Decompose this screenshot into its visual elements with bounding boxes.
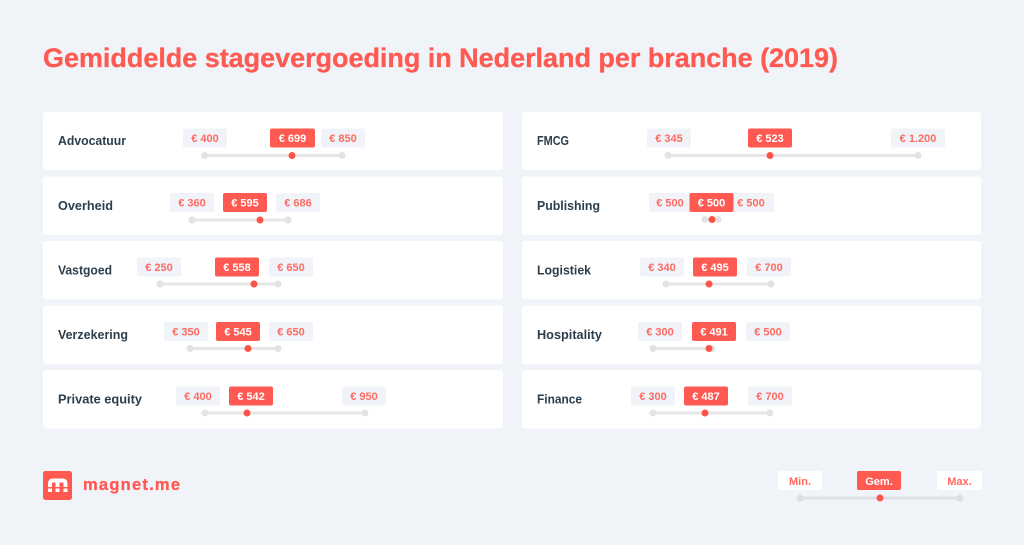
panel: Logistiek: € 700 [755, 262, 783, 274]
panel: Logistiek: € 495 [701, 262, 729, 274]
panel: Hospitality: € 300 [646, 326, 674, 338]
panel: Hospitality: Hospitality [537, 328, 602, 342]
panel: Verzekering [43, 306, 503, 364]
panel: Verzekering: € 350 [172, 326, 200, 338]
panel: Advocatuur: € 400 [191, 133, 219, 145]
legend: Gem. [865, 476, 893, 488]
icon: magnet [43, 471, 72, 500]
panel: Finance: € 487 [692, 391, 720, 403]
panel: Overheid: € 360 [178, 198, 206, 210]
panel: Logistiek: Logistiek [537, 264, 591, 278]
panel: Vastgoed: € 250 [145, 262, 173, 274]
panel: Finance: Finance [537, 392, 582, 406]
panel: Hospitality: € 491 [700, 326, 728, 338]
panel: Verzekering: Verzekering [58, 328, 128, 342]
title: Gemiddelde stagevergoeding in Nederland per branche (2019) [43, 43, 838, 73]
panel: Finance: € 700 [756, 391, 784, 403]
panel: Advocatuur: € 850 [329, 133, 357, 145]
panel: Vastgoed: Vastgoed [58, 264, 112, 278]
panel: Vastgoed: € 650 [277, 262, 305, 274]
panel: FMCG: FMCG [537, 134, 569, 148]
legend [778, 471, 982, 502]
panel: Verzekering: € 650 [277, 326, 305, 338]
panel: Hospitality: € 500 [754, 326, 782, 338]
panel: Verzekering: € 545 [224, 326, 252, 338]
panel: Overheid [43, 176, 503, 235]
panel: Publishing: € 500 [698, 198, 725, 210]
panel: Private equity [43, 370, 503, 428]
panel: Publishing: € 500 [656, 198, 684, 210]
panel: Publishing: Publishing [537, 199, 600, 213]
panel: Overheid: € 595 [231, 198, 259, 210]
panel: Advocatuur: Advocatuur [58, 134, 126, 148]
panel: Overheid: Overheid [58, 199, 113, 213]
panel: Logistiek: € 340 [648, 262, 676, 274]
panel: Publishing [522, 176, 981, 235]
legend: Min. [789, 476, 811, 488]
panel: FMCG: € 1.200 [900, 133, 936, 145]
panel: Advocatuur [43, 112, 503, 170]
panel: Private equity: Private equity [58, 392, 142, 406]
legend: Max. [947, 476, 972, 488]
panel: Vastgoed [43, 241, 503, 300]
panel: Private equity: € 542 [237, 391, 265, 403]
panel: Vastgoed: € 558 [223, 262, 251, 274]
panel: Private equity: € 950 [350, 391, 378, 403]
panel: Private equity: € 400 [184, 391, 212, 403]
panel: Finance: € 300 [639, 391, 667, 403]
logo: magnet.me [43, 471, 180, 500]
panel: Finance [522, 370, 981, 428]
panel: FMCG: € 523 [756, 133, 784, 145]
wordmark: magnet.me [83, 476, 180, 494]
panel: FMCG: € 345 [655, 133, 683, 145]
panel: Logistiek [522, 241, 981, 300]
panel: FMCG [522, 112, 981, 170]
panel: Overheid: € 686 [284, 198, 312, 210]
panel: Hospitality [522, 306, 981, 364]
panel: Advocatuur: € 699 [279, 133, 306, 145]
panel: Publishing: € 500 [737, 198, 765, 210]
